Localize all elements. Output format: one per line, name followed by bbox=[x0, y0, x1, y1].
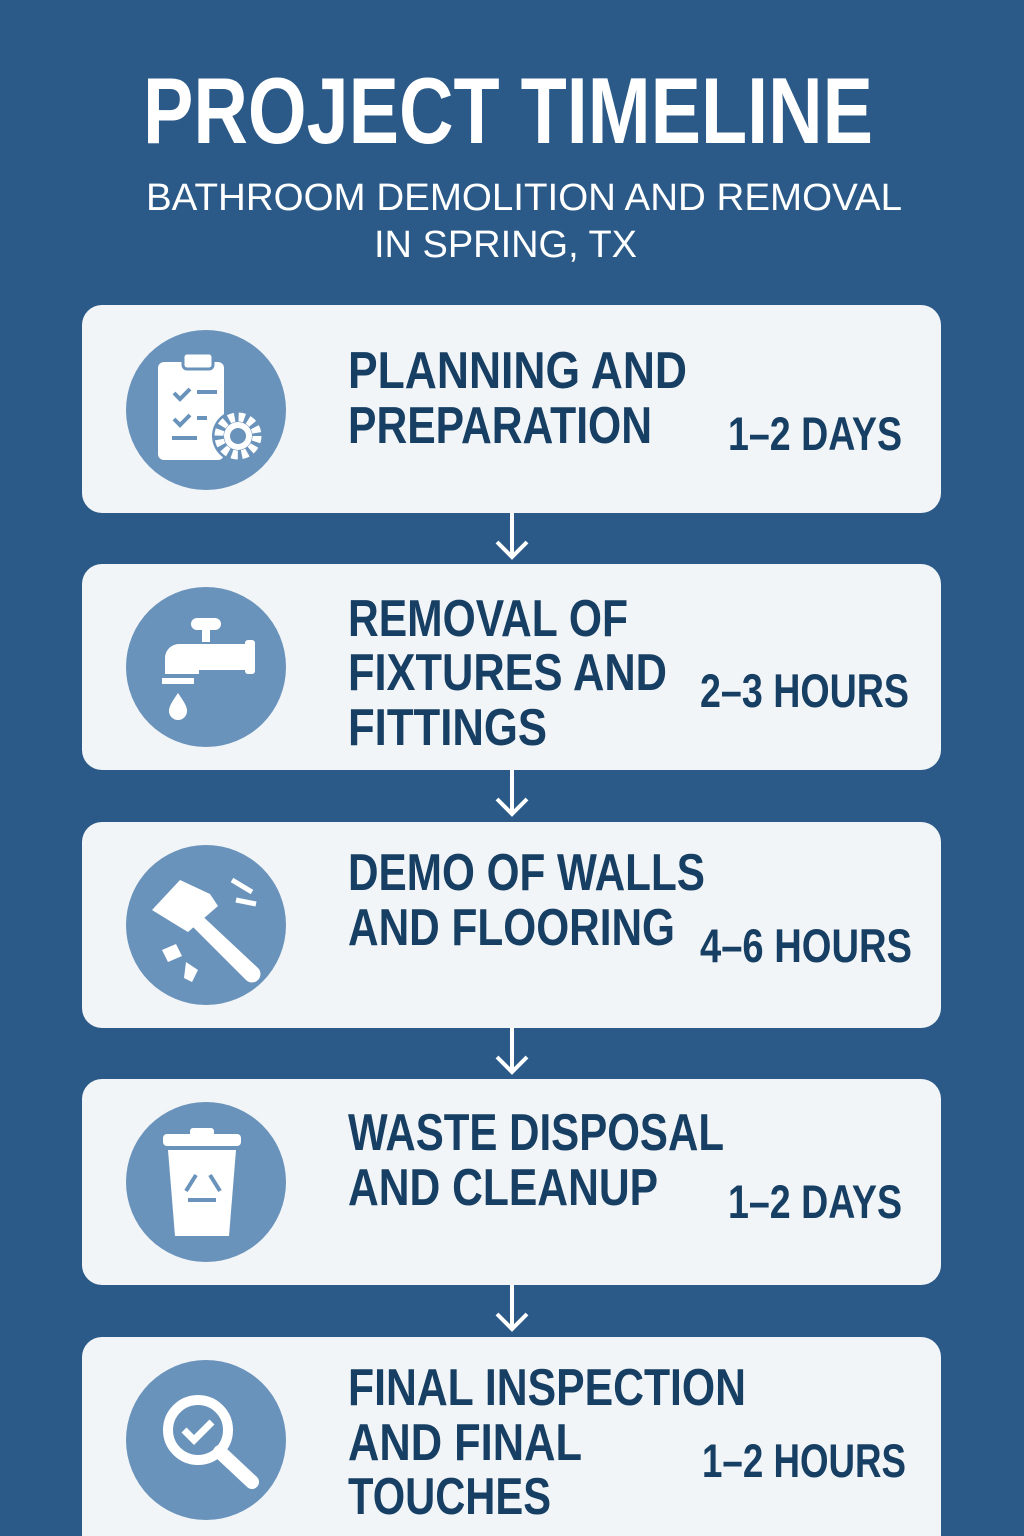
heading: waste: WASTE DISPOSAL bbox=[348, 1104, 724, 1162]
arrow bbox=[497, 770, 527, 814]
heading: planning bbox=[348, 342, 687, 455]
arrow bbox=[497, 513, 527, 557]
duration: 4–6 HOURS bbox=[700, 919, 912, 972]
panel: demo of walls bbox=[82, 822, 941, 1028]
heading: final: AND FINAL bbox=[348, 1414, 582, 1472]
arrow bbox=[497, 1028, 527, 1072]
heading: demo: AND FLOORING bbox=[348, 899, 675, 957]
icon: faucet bbox=[126, 587, 286, 747]
heading: planning: PREPARATION bbox=[348, 397, 652, 455]
heading: removal: REMOVAL OF bbox=[348, 590, 628, 648]
icon: recycling bin bbox=[126, 1102, 286, 1262]
duration: 1–2 DAYS bbox=[728, 1175, 902, 1228]
duration: 1–2 DAYS bbox=[728, 407, 902, 460]
heading: final: FINAL INSPECTION bbox=[348, 1359, 746, 1417]
heading: demo: DEMO OF WALLS bbox=[348, 844, 705, 902]
heading: waste bbox=[348, 1104, 724, 1217]
subtitle: BATHROOM DEMOLITION AND REMOVAL bbox=[146, 177, 902, 219]
arrow bbox=[497, 1285, 527, 1329]
heading: final: TOUCHES bbox=[348, 1468, 551, 1526]
panel: planning and preparation bbox=[82, 305, 941, 513]
icon: clipboard with gear bbox=[126, 330, 286, 490]
panel: final inspection bbox=[82, 1337, 941, 1536]
icon: hammer bbox=[126, 845, 286, 1005]
heading: removal: FITTINGS bbox=[348, 699, 547, 757]
heading: removal: FIXTURES AND bbox=[348, 644, 667, 702]
panel: waste disposal bbox=[82, 1079, 941, 1285]
subtitle bbox=[146, 177, 902, 266]
subtitle: IN SPRING, TX bbox=[374, 224, 637, 266]
duration: 1–2 HOURS bbox=[702, 1434, 906, 1487]
duration: 2–3 HOURS bbox=[700, 664, 909, 717]
heading: demo bbox=[348, 844, 705, 957]
heading: removal bbox=[348, 590, 667, 757]
heading: final bbox=[348, 1359, 746, 1526]
heading: waste: AND CLEANUP bbox=[348, 1159, 658, 1217]
panel: removal of fixtures bbox=[82, 564, 941, 770]
heading: planning: PLANNING AND bbox=[348, 342, 687, 400]
icon: magnifier check bbox=[126, 1360, 286, 1520]
